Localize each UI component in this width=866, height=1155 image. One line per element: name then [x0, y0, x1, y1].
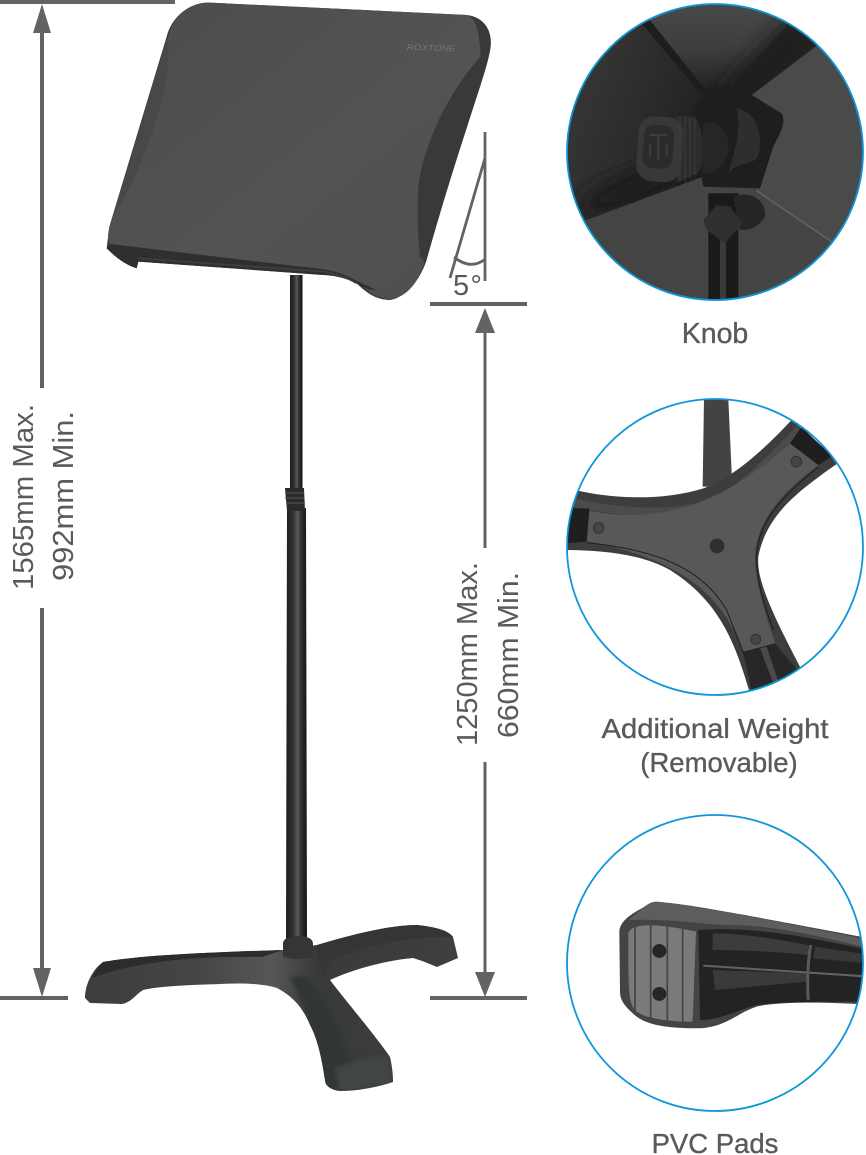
- pads photo: [619, 902, 866, 1028]
- label: overall height values: 992mm Min.: [48, 411, 80, 581]
- label: desk height values: [452, 562, 525, 746]
- PVC pad: [628, 925, 696, 1022]
- top panel: [674, 49, 785, 91]
- label: desk height values: 1250mm Max.: [452, 562, 484, 746]
- caption: Additional Weight: [602, 713, 829, 744]
- angle indicator: 5 degrees: [450, 132, 485, 302]
- dimension: overall height: [0, 0, 175, 1000]
- lower pole: [708, 193, 738, 303]
- right panel: [752, 46, 827, 103]
- small knob: [733, 195, 765, 230]
- pole: [285, 275, 307, 943]
- caption: removable note: (Removable): [640, 747, 798, 778]
- main knob: [676, 116, 703, 182]
- weight photo: [560, 399, 840, 693]
- label: overall height values: [8, 404, 80, 590]
- music stand: [85, 3, 491, 1092]
- detail: additional weight: [560, 399, 863, 744]
- weight plate: [587, 443, 818, 652]
- ring: [567, 4, 863, 300]
- dimension: desk height: [430, 302, 527, 1000]
- ring: [567, 399, 863, 695]
- ring: [567, 815, 863, 1111]
- left panel: [568, 24, 703, 220]
- mount bracket: [702, 95, 784, 188]
- desk panel: [107, 3, 491, 300]
- desk lip: [107, 244, 377, 290]
- angle indicator: 5 degrees: 5°: [453, 270, 482, 302]
- detail: PVC pads: [567, 815, 866, 1155]
- tripod base: [85, 925, 458, 1092]
- brand mark: ROXTONE: [407, 42, 456, 53]
- bottom panels: [588, 178, 701, 224]
- detail: knob: [560, 0, 866, 350]
- caption: Knob: [682, 318, 748, 350]
- foot cavity: [698, 929, 866, 1020]
- knob photo: [560, 0, 866, 307]
- label: overall height values: 1565mm Max.: [8, 404, 40, 590]
- label: desk height values: 660mm Min.: [493, 572, 525, 738]
